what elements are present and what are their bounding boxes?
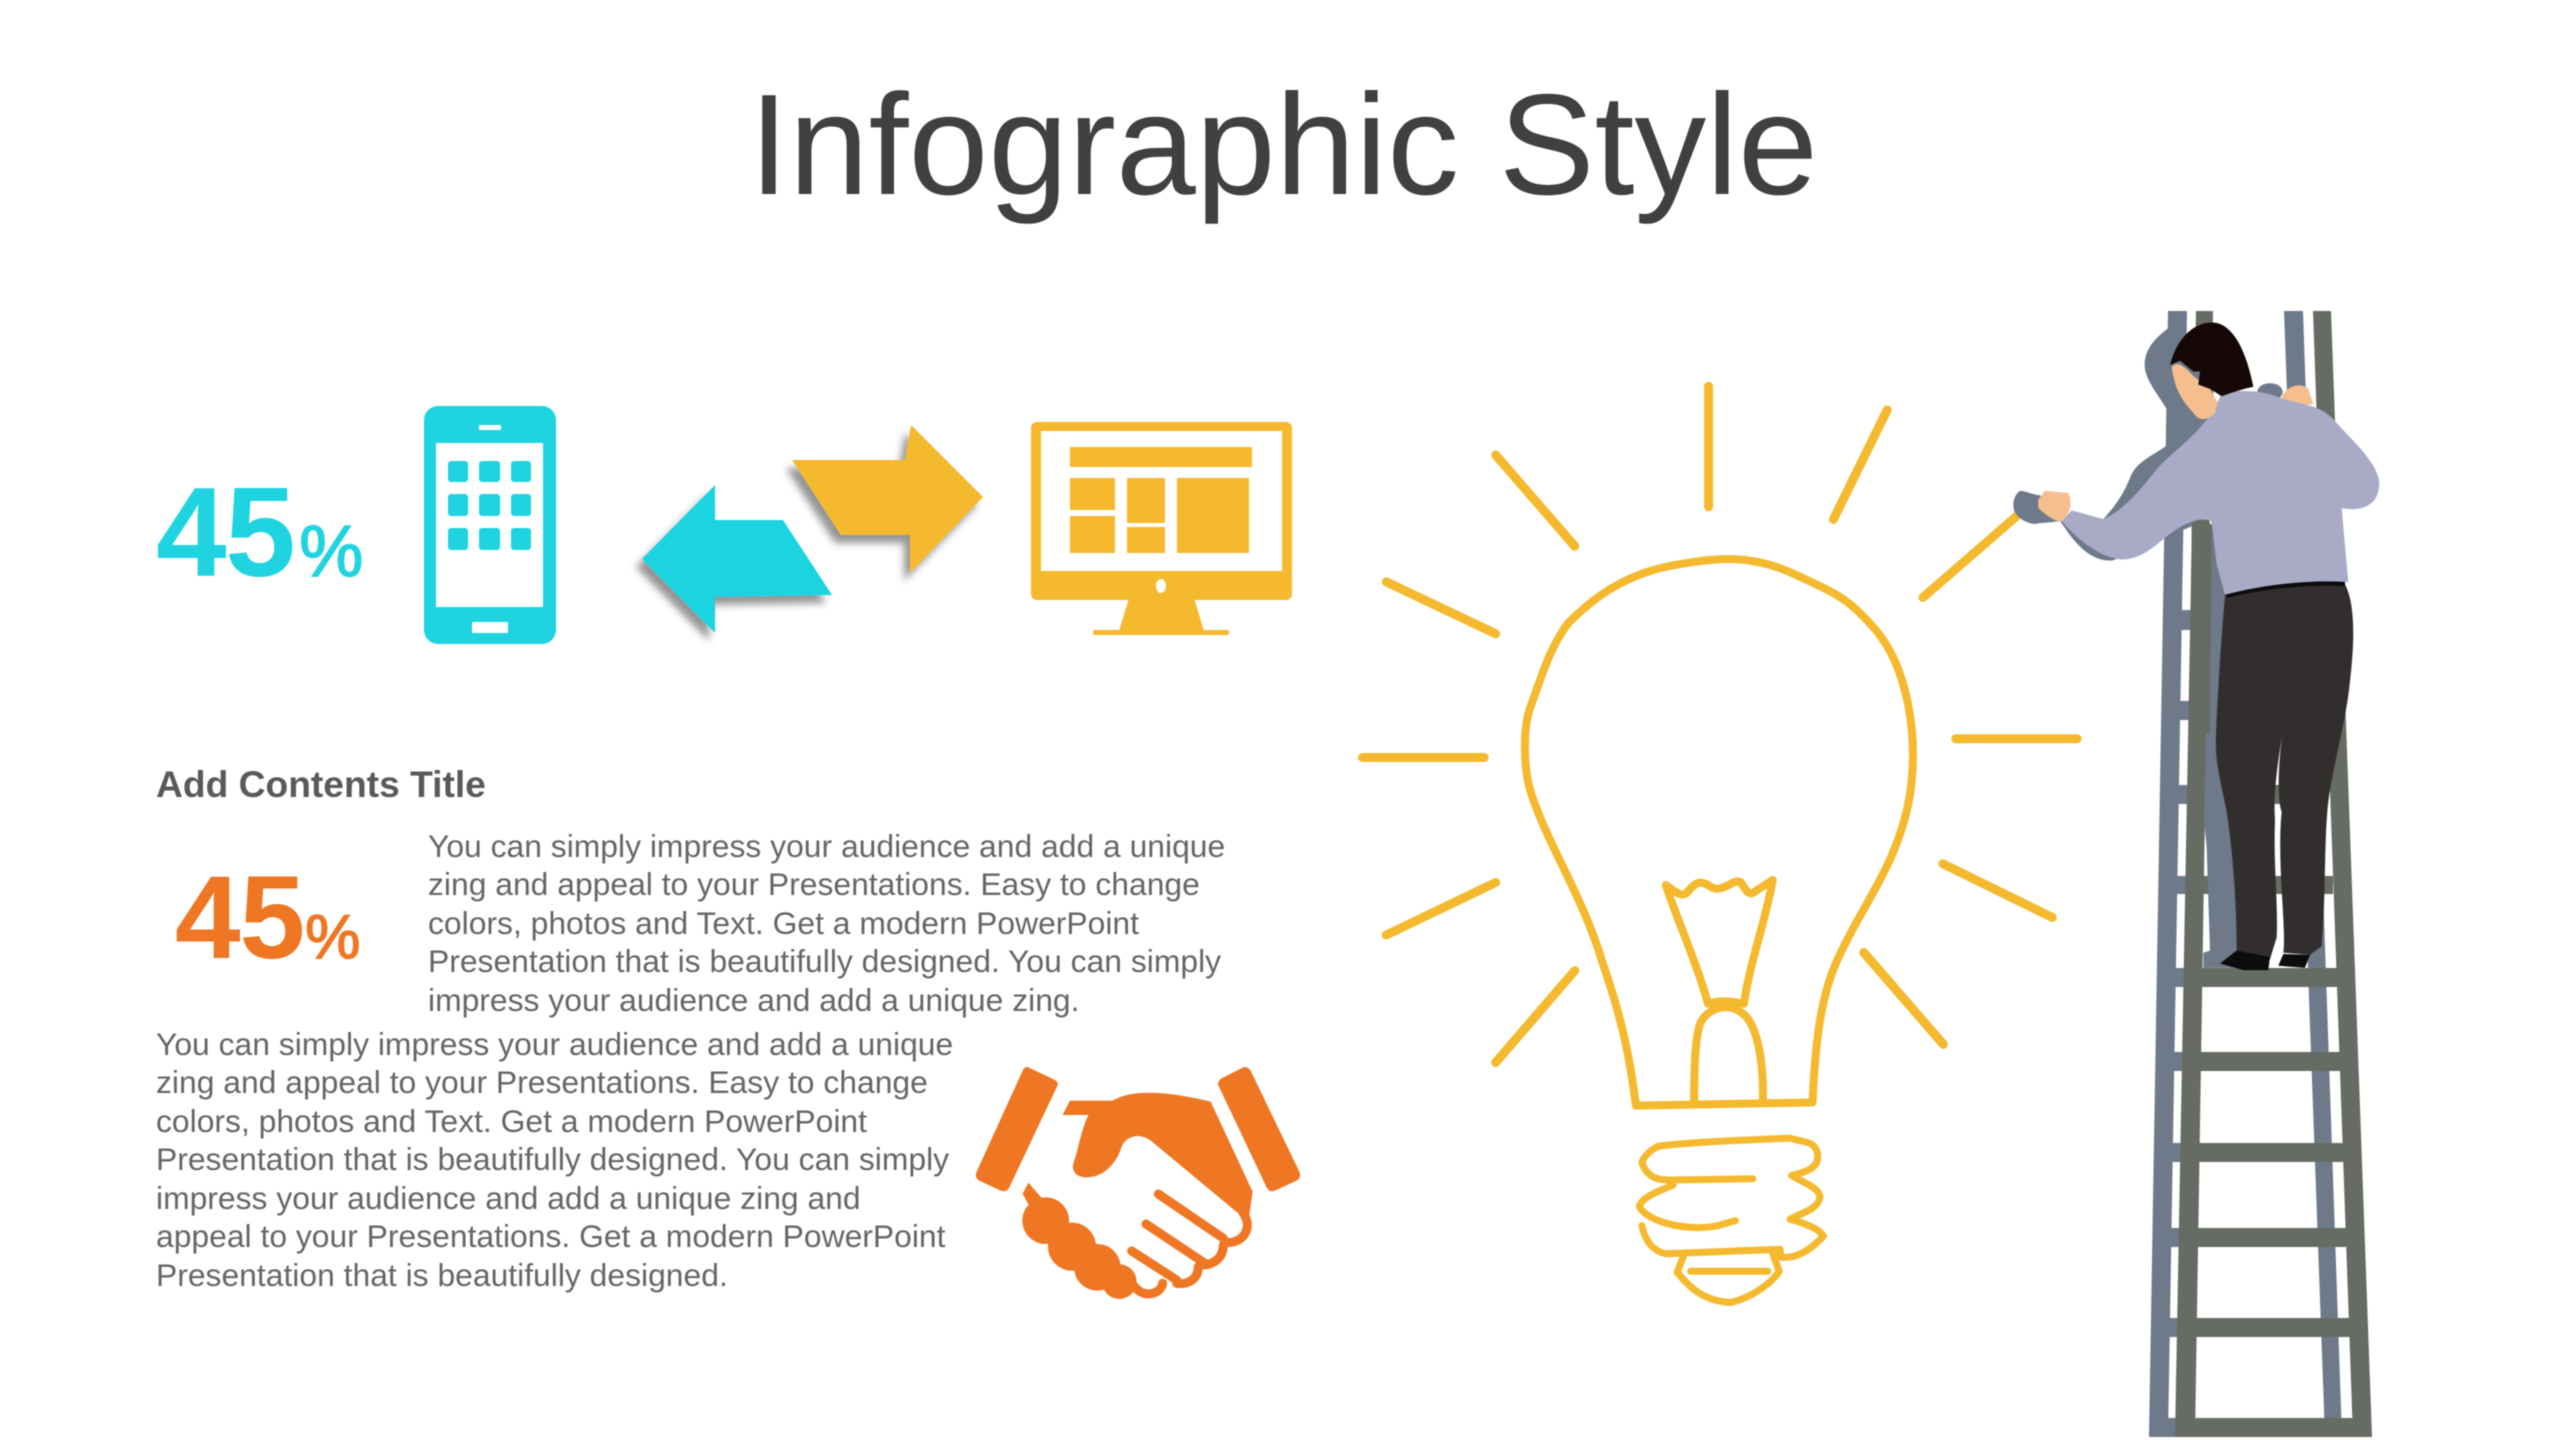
man face [2172, 364, 2217, 419]
icon: handshake [976, 1067, 1300, 1299]
title: Infographic Style [749, 65, 1818, 225]
bulb outline and filament [1525, 559, 1913, 1106]
arrow: yellow pointing right [792, 425, 983, 573]
man belt [2225, 581, 2345, 598]
icon: desktop monitor [1031, 422, 1292, 635]
man trousers [2216, 583, 2353, 959]
bulb screw base [1639, 1138, 1823, 1302]
man left hand [2038, 491, 2071, 522]
illustration: man on ladder [2013, 323, 2379, 970]
text block: lower left: You can simply impress your audience and add a unique zing and appeal to your Presentations. Easy to change colors, photos and Text. Get a modern PowerPoint Presentation that is beautifully designed. You can simply impress your audience and add a unique zing and appeal to your Presentations. Get a modern PowerPoint Presentation that is beautifully designed. [156, 1026, 953, 1293]
text block: right of stat: You can simply impress your audience and add a unique zing and appeal to your Presentations. Easy to change colors, photos and Text. Get a modern PowerPoint Presentation that is beautifully designed. You can simply impress your audience and add a unique zing. [428, 828, 1225, 1018]
stat: cyan 45 percent: 45% [156, 461, 363, 603]
contents heading: Add Contents Title [156, 763, 486, 805]
illustration: light bulb with rays [1362, 386, 2077, 1302]
arrow: cyan pointing left [642, 485, 832, 633]
man shoes [2220, 951, 2310, 970]
man hair [2170, 323, 2253, 396]
bulb rays [1362, 386, 2077, 1062]
stat: orange 45 percent: 45% [175, 852, 360, 984]
icon: smartphone [424, 406, 556, 644]
man right hand [2282, 385, 2313, 406]
man shadow [2013, 328, 2213, 560]
man shirt [2062, 391, 2379, 595]
illustration: step ladder [2149, 311, 2372, 1437]
